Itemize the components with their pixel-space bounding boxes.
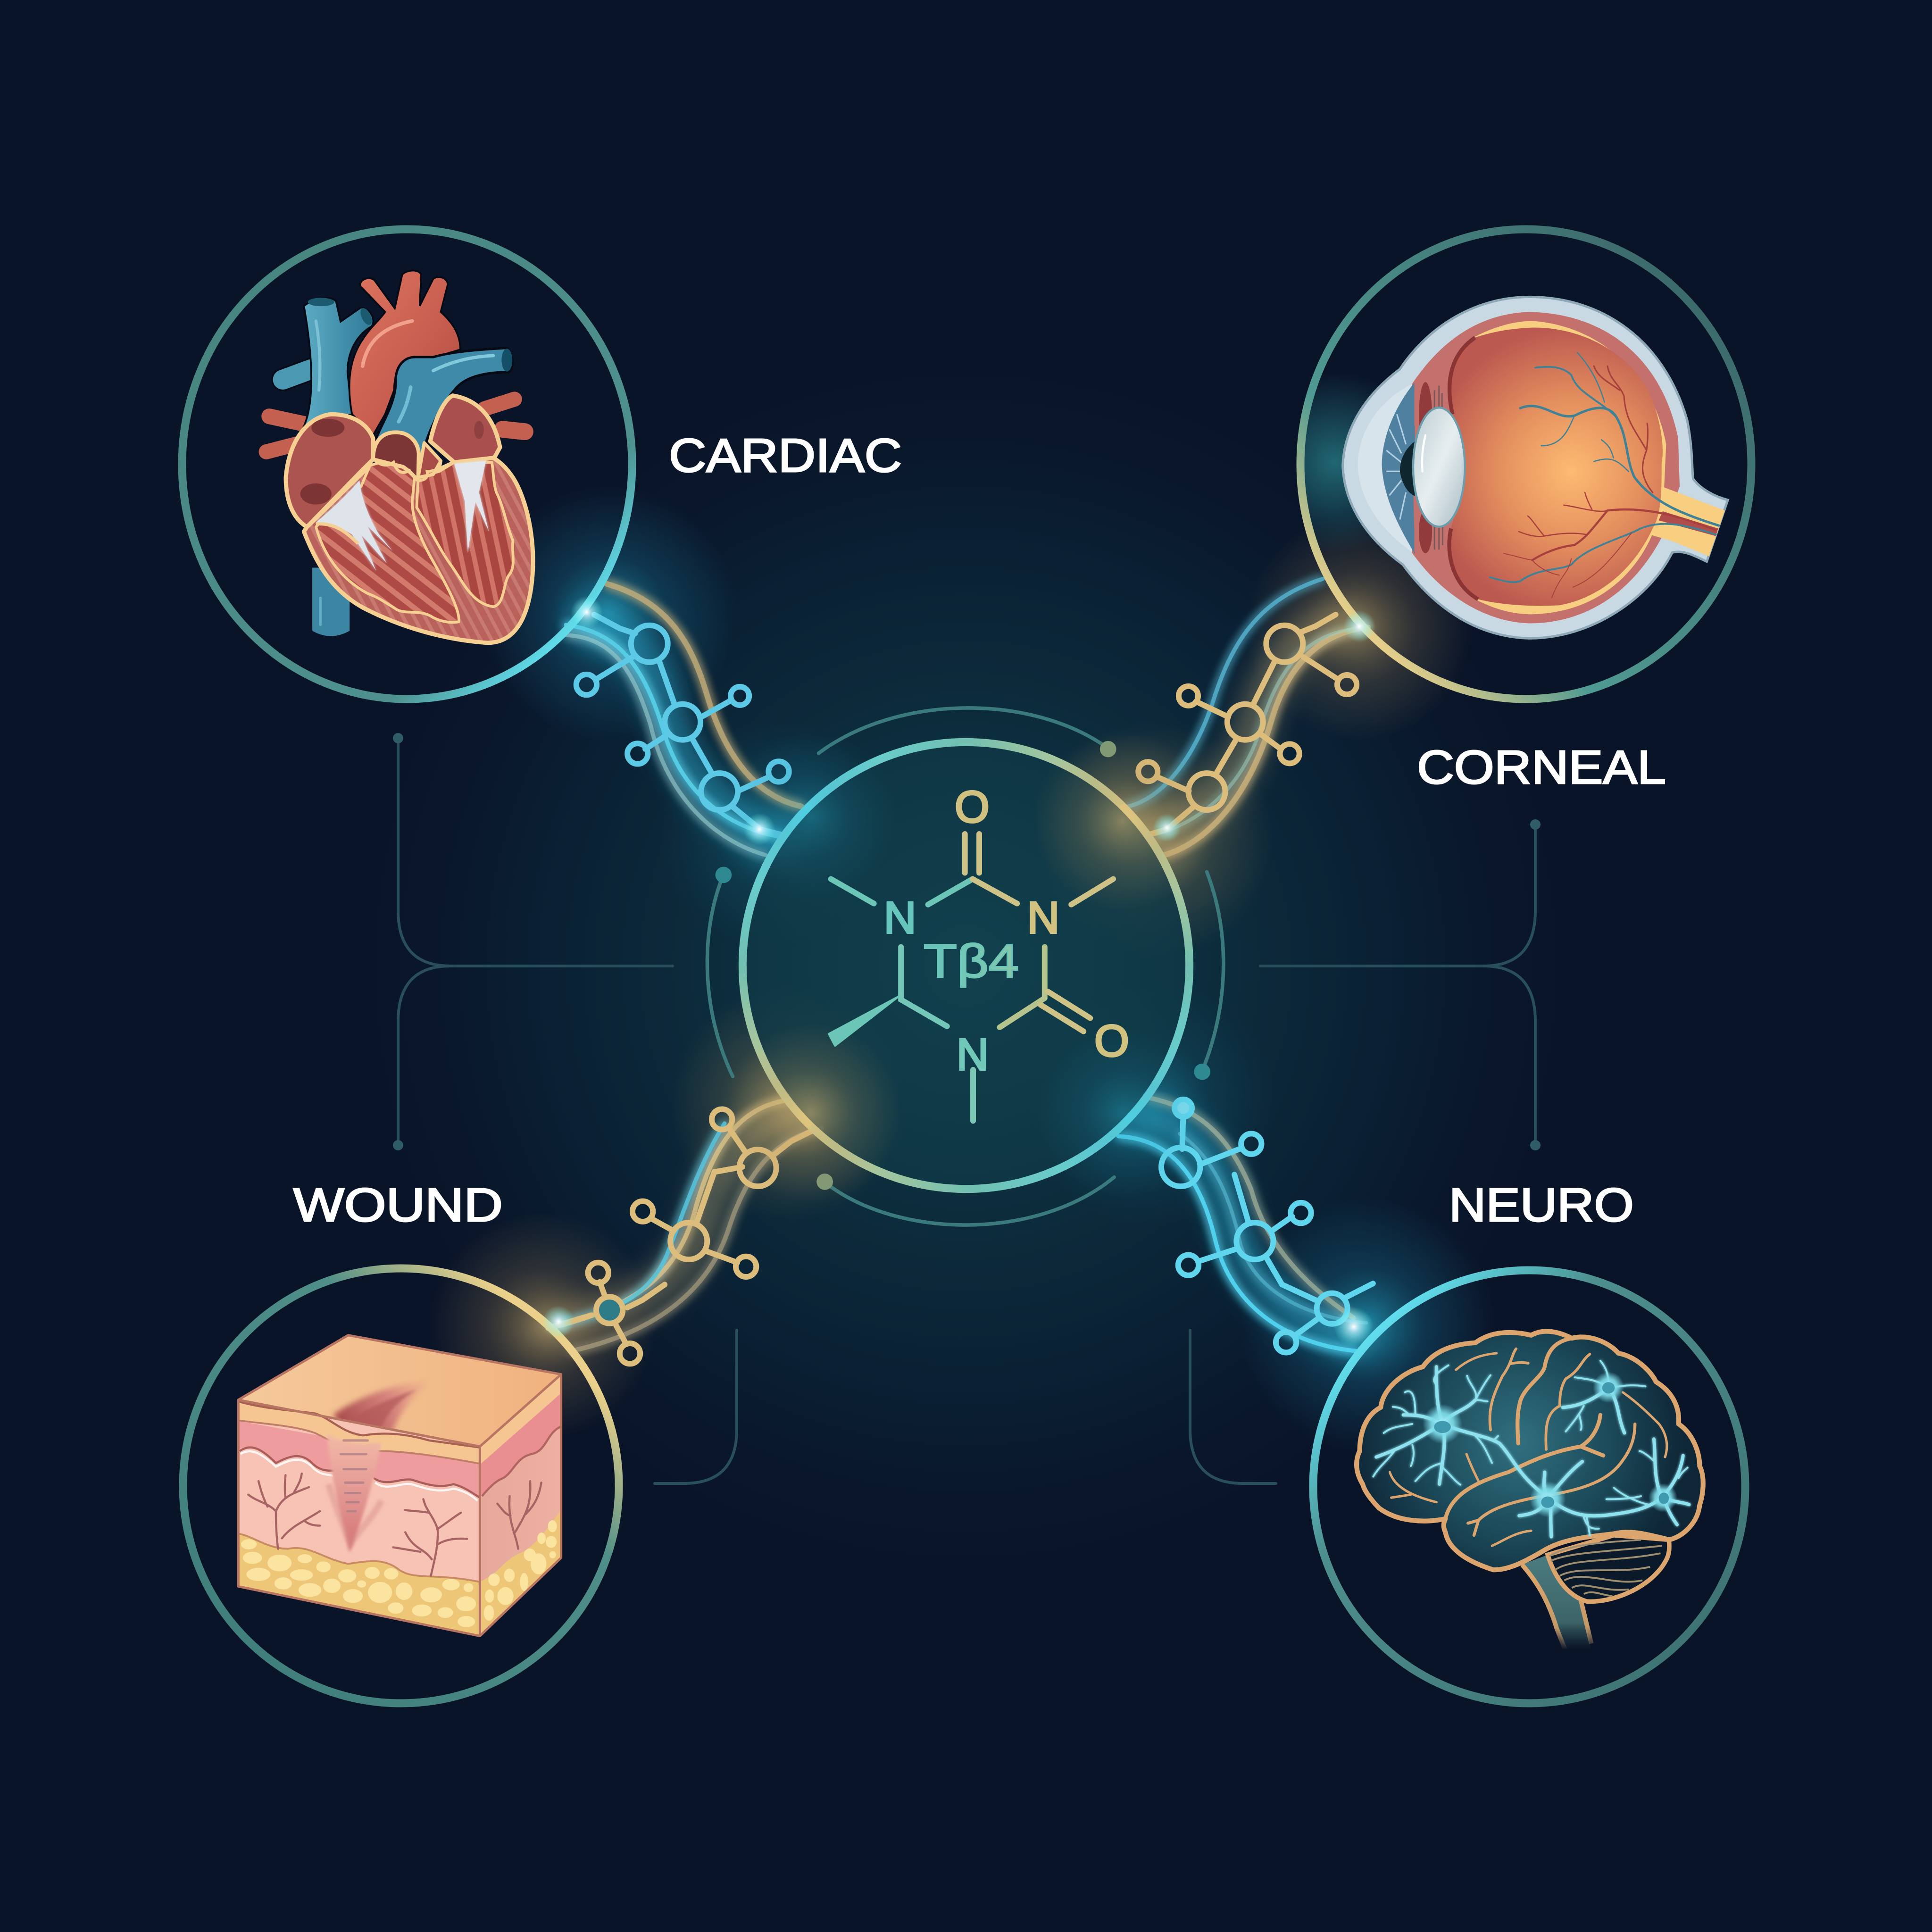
atom labels: N — [957, 1030, 989, 1080]
molecule chain: cardiac — [576, 615, 789, 834]
ring: neuro — [1313, 1270, 1745, 1703]
ring: corneal — [1300, 229, 1751, 699]
centre label: Tβ4 — [924, 935, 1019, 988]
atom labels: N — [884, 893, 916, 943]
centre badge: Tβ4 molecule — [707, 708, 1224, 1225]
light flares — [542, 596, 1375, 1347]
label: corneal: CORNEAL — [1417, 741, 1666, 794]
orbit arcs — [707, 708, 1224, 1225]
label: wound: WOUND — [293, 1179, 503, 1232]
connector lines — [393, 733, 1541, 1483]
ribbon: cardiac to centre — [566, 584, 801, 855]
molecule chain: corneal — [1138, 615, 1357, 834]
label: cardiac: CARDIAC — [669, 429, 902, 482]
label: neuro: NEURO — [1449, 1179, 1634, 1232]
wound panel — [183, 1268, 619, 1703]
ribbon: corneal to centre — [1129, 579, 1368, 855]
icon: eye — [1343, 297, 1728, 638]
atom labels: O — [1094, 1016, 1129, 1066]
molecule chain: wound — [548, 1109, 811, 1364]
ring: cardiac — [182, 229, 632, 699]
atom labels — [884, 782, 1129, 1080]
molecule chain: neuro — [1161, 1099, 1373, 1352]
molecular structure — [829, 834, 1113, 1121]
ribbon halos — [556, 622, 1354, 1338]
icon: brain — [1357, 1331, 1703, 1649]
neuro panel — [1313, 1270, 1745, 1703]
ribbon: wound to centre — [550, 1100, 822, 1351]
icon: skin block — [238, 1335, 562, 1636]
ring: wound — [183, 1268, 619, 1703]
cardiac panel — [182, 229, 632, 699]
ribbon: neuro to centre — [1118, 1098, 1366, 1351]
large glows — [429, 373, 1495, 1453]
atom labels: O — [955, 782, 990, 832]
ring corner tints — [722, 731, 1212, 1203]
main ring — [742, 742, 1190, 1189]
icon: heart — [266, 270, 533, 643]
atom labels: N — [1027, 893, 1059, 943]
corneal panel — [1300, 229, 1751, 699]
